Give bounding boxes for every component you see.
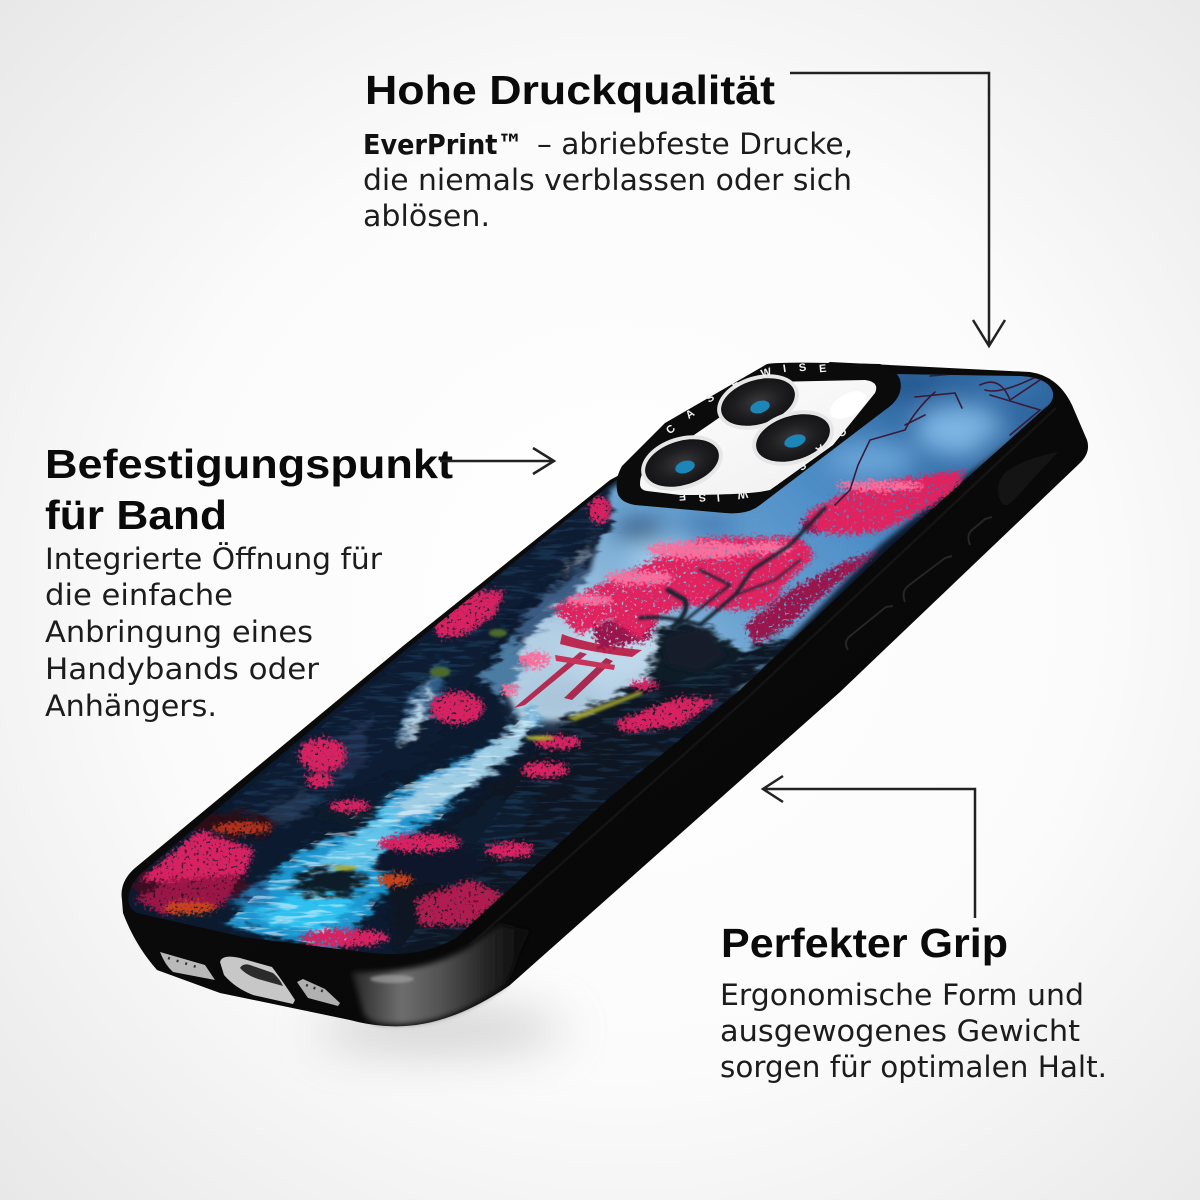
arrow: grip bbox=[763, 776, 975, 918]
description: – abriebfeste Drucke, bbox=[537, 127, 853, 161]
stream and waterfall bbox=[225, 705, 540, 950]
description: Integrierte Öffnung für bbox=[45, 542, 382, 576]
torii lower beam bbox=[555, 655, 615, 670]
trunk base bbox=[662, 630, 725, 672]
arrow: print quality bbox=[790, 73, 1005, 346]
blossoms: lower groups bbox=[135, 496, 718, 947]
camera plate bbox=[640, 380, 876, 495]
brand text lower: W bbox=[736, 487, 749, 501]
case artwork bbox=[128, 374, 1054, 954]
callout: Perfekter Grip bbox=[720, 920, 1107, 1084]
water ripples bbox=[225, 705, 540, 950]
corner sheen bbox=[352, 925, 530, 1024]
side button: power bbox=[968, 517, 992, 545]
heading bbox=[45, 441, 453, 538]
brand text upper: E bbox=[729, 377, 742, 391]
left cliff bbox=[258, 490, 620, 828]
brand text upper: E bbox=[819, 363, 827, 375]
description bbox=[45, 542, 382, 723]
description: Anhängers. bbox=[45, 689, 217, 723]
brand text lower: C bbox=[835, 424, 848, 439]
brand text upper: S bbox=[704, 391, 717, 405]
bottom speaker left bbox=[160, 952, 215, 980]
brand text lower: E bbox=[767, 475, 779, 489]
heading: Befestigungspunkt bbox=[45, 441, 453, 487]
side rim highlight bbox=[470, 408, 1056, 945]
brand text lower: I bbox=[716, 491, 720, 503]
bump frame bbox=[617, 363, 901, 513]
phone case bbox=[122, 362, 1088, 1026]
description: Handybands oder bbox=[45, 652, 319, 686]
lower right dark ground bbox=[385, 622, 800, 960]
usb port bbox=[220, 957, 295, 1004]
description: EverPrint™ bbox=[363, 128, 523, 161]
callout: Hohe Druckqualität bbox=[363, 67, 853, 233]
description: Anbringung eines bbox=[45, 615, 313, 649]
flash bbox=[825, 385, 871, 425]
side switch bbox=[998, 452, 1058, 505]
description: die niemals verblassen oder sich bbox=[363, 163, 852, 197]
side button: volume bbox=[904, 556, 952, 602]
description bbox=[363, 127, 853, 233]
description bbox=[720, 978, 1107, 1084]
sheen highlight bbox=[370, 975, 414, 983]
lens lower bbox=[634, 426, 730, 500]
brand text lower: S bbox=[795, 458, 808, 472]
description: die einfache bbox=[45, 578, 233, 612]
brand text lower: E bbox=[678, 490, 686, 502]
torii gate bbox=[514, 634, 642, 708]
brand text lower: A bbox=[813, 441, 826, 456]
blossoms: canopy bbox=[553, 470, 965, 640]
heading: Perfekter Grip bbox=[721, 920, 1008, 966]
camera bump bbox=[617, 362, 901, 513]
moss accents bbox=[333, 629, 643, 870]
brand text upper bbox=[664, 362, 827, 437]
lens middle bbox=[745, 401, 841, 475]
bottom speaker right bbox=[297, 979, 340, 1006]
tree branches bbox=[640, 508, 825, 628]
dark base bbox=[128, 375, 1053, 954]
description: ablösen. bbox=[363, 199, 490, 233]
brand text upper: W bbox=[760, 366, 773, 380]
cliff and ground strokes bbox=[130, 490, 790, 950]
side button: action bbox=[846, 606, 893, 650]
description: ausgewogenes Gewicht bbox=[720, 1014, 1080, 1048]
callout: Befestigungspunkt für Band bbox=[45, 441, 453, 723]
phone shadow bbox=[315, 1008, 565, 1052]
clouds bbox=[520, 375, 1045, 718]
brand text upper: S bbox=[798, 362, 807, 374]
blossoms: canopy highlights bbox=[502, 481, 924, 696]
blossoms: canopy shade bbox=[590, 517, 880, 650]
lens top bbox=[710, 365, 806, 439]
bare branches bbox=[835, 372, 1040, 505]
brand text upper: I bbox=[782, 363, 787, 375]
heading: für Band bbox=[45, 492, 227, 538]
brand text lower bbox=[678, 424, 848, 503]
arrow: strap attachment bbox=[440, 448, 554, 474]
description: sorgen für optimalen Halt. bbox=[720, 1050, 1107, 1084]
torii posts bbox=[514, 652, 587, 708]
brand text upper: C bbox=[664, 423, 678, 437]
description: Ergonomische Form und bbox=[720, 978, 1084, 1012]
sky bbox=[500, 368, 1060, 720]
brand text upper: A bbox=[684, 407, 697, 422]
torii top beam bbox=[560, 634, 642, 657]
river rocks bbox=[130, 800, 485, 903]
heading: Hohe Druckqualität bbox=[365, 67, 775, 113]
case body bbox=[122, 362, 1088, 1026]
brand text lower: S bbox=[698, 491, 706, 503]
